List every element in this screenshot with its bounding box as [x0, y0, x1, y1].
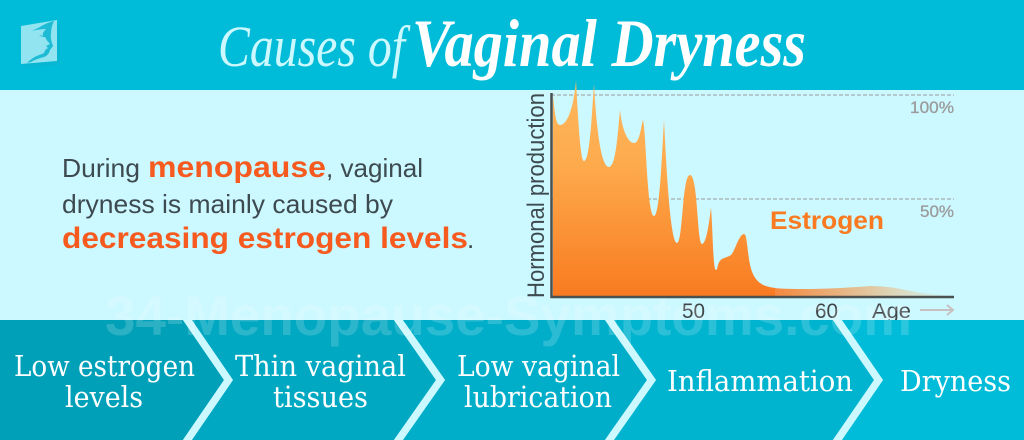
y axis label: Hormonal production — [523, 93, 550, 298]
text block: menopause explanation: decreasing estrogen levels — [62, 222, 468, 255]
chart gridlines and percent labels: 50% — [920, 202, 954, 221]
step labels: Thin vaginal — [235, 349, 406, 383]
estrogen label: Estrogen — [770, 207, 884, 235]
title: Causes of — [218, 14, 411, 79]
estrogen area — [553, 80, 775, 297]
x axis labels: 60 — [815, 300, 838, 323]
arrow: age direction — [920, 305, 953, 315]
step labels: lubrication — [464, 380, 612, 414]
text block: menopause explanation — [62, 151, 474, 255]
estrogen tail area — [755, 278, 954, 297]
chart gridlines and percent labels: 100% — [910, 98, 954, 117]
title — [218, 5, 806, 81]
process flow band — [0, 318, 1024, 440]
step 5 background — [0, 320, 1024, 440]
chevron arrows — [186, 318, 878, 440]
step labels: Low vaginal — [457, 349, 620, 383]
estrogen chart — [523, 80, 954, 323]
background panel — [0, 90, 1024, 321]
text block: menopause explanation: During — [62, 153, 140, 183]
step labels: Inflammation — [667, 364, 853, 398]
watermark: 34-Menopause-Symptoms.com — [105, 284, 912, 347]
step labels — [14, 349, 1011, 414]
text block: menopause explanation: . — [467, 224, 474, 254]
step labels: Dryness — [900, 364, 1011, 398]
x axis labels: Age — [872, 300, 911, 323]
axes — [552, 93, 954, 297]
title: Vaginal Dryness — [412, 5, 806, 81]
step 1 background — [0, 320, 228, 440]
step 2 background — [0, 320, 440, 440]
text block: menopause explanation: menopause — [148, 151, 326, 184]
icon: logo face page — [21, 20, 60, 68]
header band — [0, 0, 1024, 90]
chart gridlines and percent labels — [551, 95, 954, 221]
step labels: levels — [65, 380, 143, 414]
text block: menopause explanation: , vaginal — [326, 153, 423, 183]
x axis labels: 50 — [682, 300, 705, 323]
step labels: tissues — [273, 380, 368, 414]
step labels: Low estrogen — [14, 349, 195, 383]
x axis labels — [682, 300, 911, 323]
step 3 background — [0, 320, 651, 440]
text block: menopause explanation: dryness is mainly caused by — [62, 189, 393, 219]
step 4 background — [0, 320, 879, 440]
